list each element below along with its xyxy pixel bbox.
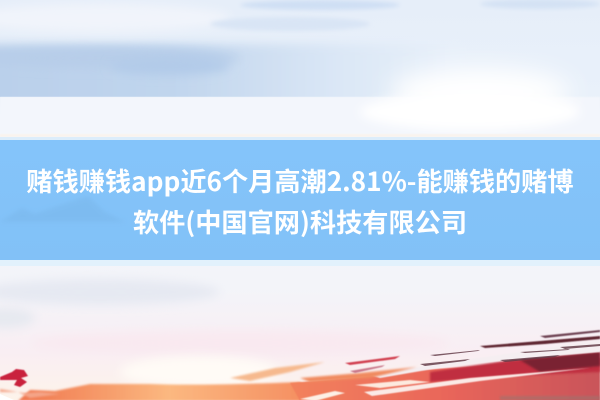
title: 软件(中国官网)科技有限公司 bbox=[133, 202, 467, 240]
blue title band bbox=[0, 140, 600, 260]
title: 赌钱赚钱app近6个月高潮2.81%-能赚钱的赌博 bbox=[26, 161, 574, 199]
title bbox=[26, 161, 574, 240]
red splatter bbox=[0, 369, 28, 387]
sunset brush stroke bbox=[0, 330, 600, 400]
dark brush streaks bbox=[480, 336, 600, 348]
faint mountains in band bbox=[0, 196, 125, 222]
sky clouds bbox=[0, 0, 600, 140]
lower clouds bbox=[0, 260, 600, 388]
